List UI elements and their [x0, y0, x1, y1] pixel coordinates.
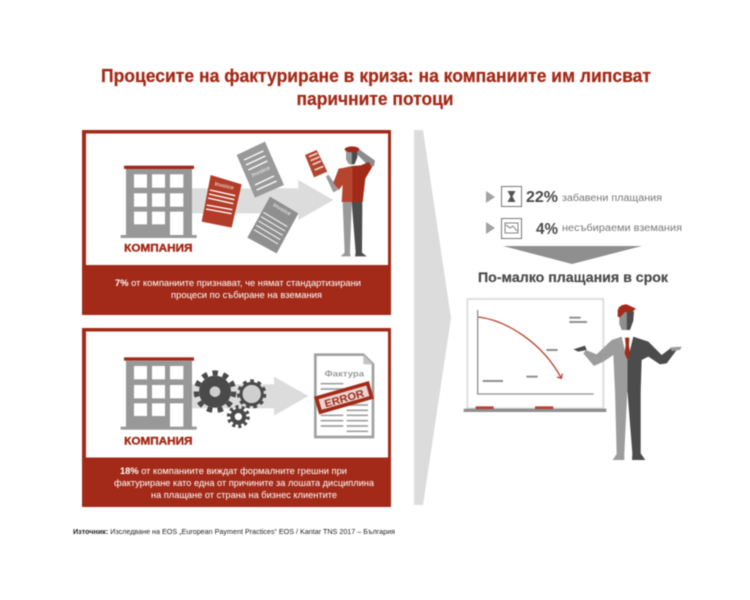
text: 7% statistic [115, 278, 361, 301]
text: 7% statistic: процеси по събиране на вземания [171, 290, 322, 301]
icon: grey invoice top [237, 142, 284, 198]
icon: red invoice [202, 175, 242, 228]
panel: invoicing errors [82, 328, 391, 507]
icon: gears [196, 373, 264, 426]
arrow: company to invoice [192, 377, 308, 416]
whiteboard chart [464, 299, 606, 412]
arrow: large chevron [414, 130, 451, 505]
label: company: КОМПАНИЯ [124, 435, 193, 447]
icon: grey invoice bottom: Invoice [272, 203, 292, 217]
icon: grey invoice top: Invoice [251, 165, 271, 179]
icon: invoice with error stamp: Фактура [325, 370, 365, 379]
text: 18% statistic: 18% от компаниите виждат формалните грешни при [120, 466, 347, 477]
illustration: presenter at whiteboard [464, 299, 682, 460]
text: 18% statistic: на плащане от страна на бизнес клиентите [151, 490, 337, 501]
icon: declining chart [505, 223, 518, 233]
text: 7% statistic: 7% от компаниите признават, че нямат стандартизирани [115, 278, 361, 289]
presenter [573, 304, 682, 460]
icon: invoice with error stamp: ERROR [323, 388, 366, 410]
stat: delayed payments [486, 186, 662, 206]
heading: fewer on-time payments: По-малко плащания в срок [478, 270, 668, 285]
panel: no standardized collection processes [82, 130, 391, 315]
icon: hourglass [508, 191, 516, 202]
icon: invoice with error stamp [315, 355, 373, 437]
stat: delayed payments: 22% [526, 189, 558, 206]
source note: Източник: Изследване на EOS „European Payment Practices“ EOS / Kantar TNS 2017 – България [73, 527, 395, 536]
icon: red invoice: Invoice [214, 181, 234, 192]
text: 18% statistic [114, 466, 375, 501]
title [101, 65, 651, 109]
stat: uncollectable receivables: несъбираеми вземания [562, 222, 682, 234]
stat: uncollectable receivables [486, 218, 682, 238]
stat: delayed payments: забавени плащания [562, 192, 662, 204]
icon: company building [121, 166, 197, 238]
title: паричните потоци [296, 88, 454, 109]
arrow: company to client [192, 180, 333, 220]
title: Процесите на фактуриране в криза: на компаниите им липсват [101, 65, 651, 86]
icon: grey invoice bottom [247, 197, 298, 253]
label: company: КОМПАНИЯ [124, 243, 193, 255]
icon: confused man with invoice [305, 146, 375, 256]
arrow: down triangle [503, 246, 642, 264]
icon: company building [121, 357, 197, 430]
text: 18% statistic: фактуриране като една от причините за лошата дисциплина [114, 478, 375, 489]
stat: uncollectable receivables: 4% [536, 221, 558, 238]
